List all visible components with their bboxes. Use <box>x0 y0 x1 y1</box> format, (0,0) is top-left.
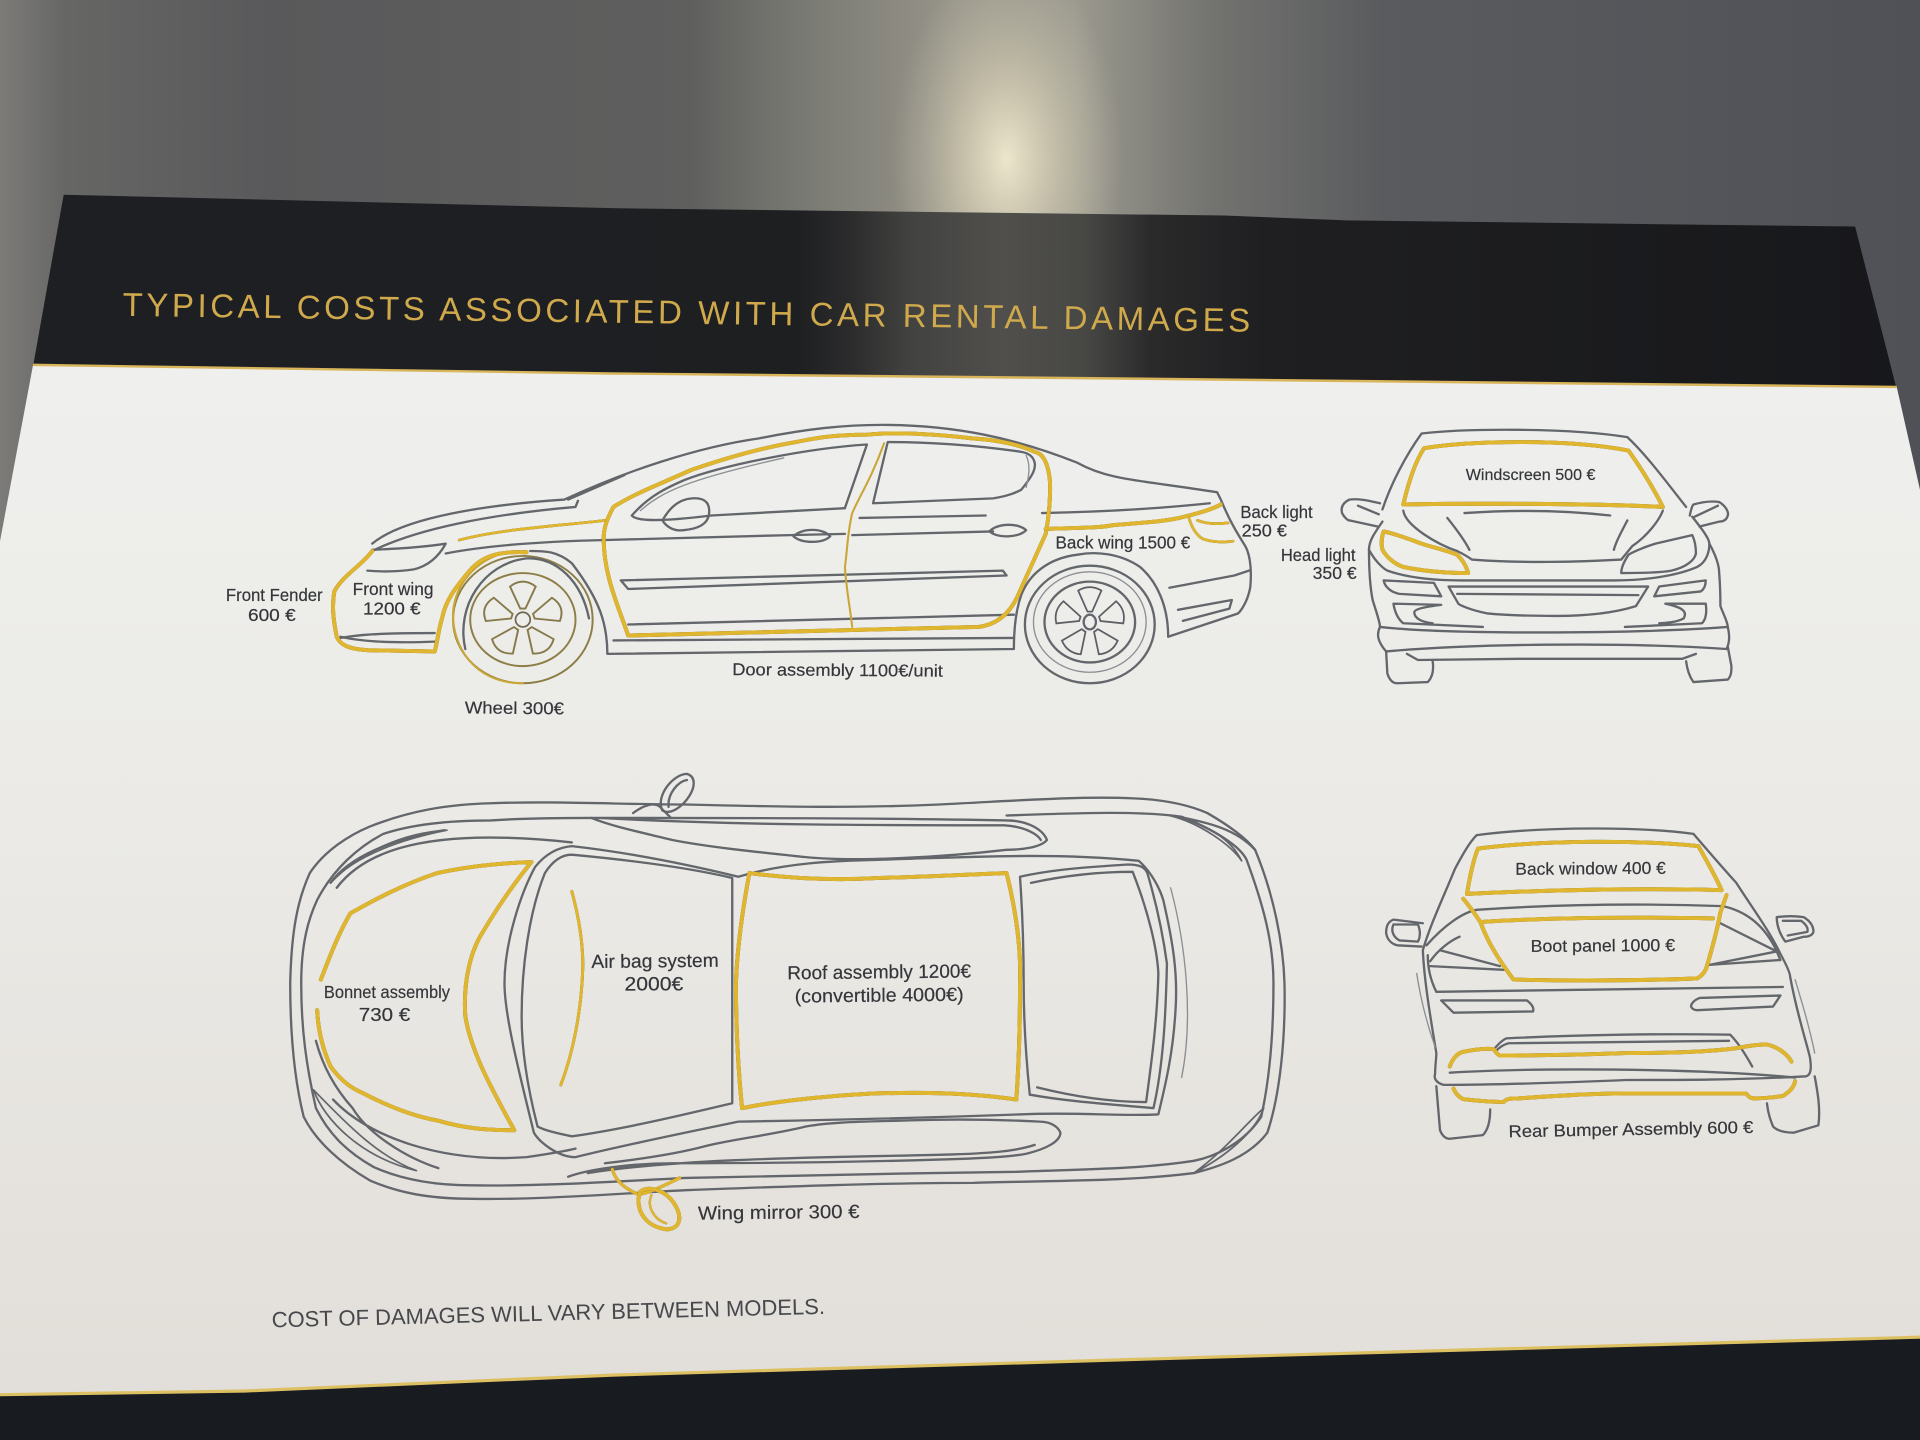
label: front wing <box>353 579 433 619</box>
front: bonnet lines <box>1403 511 1663 562</box>
label: boot panel: Boot panel 1000 € <box>1531 935 1676 956</box>
label: back light: Back light <box>1240 502 1313 522</box>
rear: side body lines <box>1417 973 1815 1053</box>
side: crease lines and sills <box>340 475 1249 642</box>
label: back window: Back window 400 € <box>1515 858 1666 879</box>
label: roof assembly: Roof assembly 1200€ <box>787 961 972 984</box>
rear: plate recess <box>1494 1034 1752 1067</box>
rear: trunk and tail lights <box>1427 905 1783 992</box>
front view of car <box>1281 430 1731 683</box>
side: body outline <box>372 425 1251 654</box>
rear: boot panel highlight <box>1463 895 1727 980</box>
rear view of car <box>1386 829 1819 1141</box>
label: head light <box>1281 545 1357 583</box>
top: roof highlight <box>736 873 1020 1108</box>
top: inner body <box>301 813 1273 1185</box>
rear: lamps <box>1441 996 1780 1013</box>
label: head light: 350 € <box>1313 563 1357 583</box>
label: head light: Head light <box>1281 545 1356 565</box>
side: front wheel <box>453 553 593 683</box>
top: rear parcel line <box>1171 888 1187 1078</box>
label: rear bumper assembly: Rear Bumper Assembly 600 € <box>1508 1117 1754 1141</box>
front: right headlight <box>1621 535 1696 573</box>
label: bonnet assembly <box>324 982 450 1025</box>
rear: bumper highlight <box>1450 1044 1791 1067</box>
label: front fender <box>226 585 323 625</box>
rear: mirrors <box>1386 916 1813 947</box>
side: door handles <box>793 525 1026 542</box>
top: upper side glass <box>591 818 1047 859</box>
footnote: COST OF DAMAGES WILL VARY BETWEEN MODELS. <box>271 1294 825 1332</box>
top: cabin outline <box>504 846 1176 1157</box>
side: door mirror <box>662 498 709 530</box>
top view of car <box>290 774 1285 1229</box>
top: outer body <box>290 798 1285 1199</box>
top: lower wing mirror highlight <box>612 1169 680 1229</box>
side: middle door seam highlight <box>845 443 884 627</box>
label: door assembly: Door assembly 1100€/unit <box>732 659 943 681</box>
label: wheel: Wheel 300€ <box>465 697 565 718</box>
label: back wing: Back wing 1500 € <box>1056 533 1191 553</box>
label: front wing: Front wing <box>353 579 433 599</box>
card bottom band <box>0 1337 1920 1440</box>
title: TYPICAL COSTS ASSOCIATED WITH CAR RENTAL DAMAGES <box>122 287 1250 340</box>
card white panel <box>0 365 1920 1395</box>
rear: back window highlight <box>1467 842 1722 894</box>
side: rear wheel <box>1025 566 1155 683</box>
top: windscreen <box>522 855 732 1136</box>
label: roof assembly: (convertible 4000€) <box>795 985 964 1008</box>
side: crease highlight <box>459 520 605 540</box>
side: front wing and fender highlight <box>333 551 527 651</box>
top: rear window <box>1020 864 1167 1108</box>
rear: wheels <box>1436 1076 1819 1139</box>
front: grille and bumper line <box>1369 544 1709 627</box>
front: mirrors <box>1342 499 1728 527</box>
card header band <box>33 195 1897 389</box>
label: air bag system <box>591 951 719 996</box>
top: lamps <box>313 816 1264 1173</box>
label: windscreen: Windscreen 500 € <box>1466 467 1596 484</box>
side: back wing highlight <box>1046 504 1221 529</box>
label: front fender: 600 € <box>248 605 296 625</box>
label: bonnet assembly: Bonnet assembly <box>324 982 450 1002</box>
front: headlight highlight <box>1382 531 1468 573</box>
top: lower side glass <box>568 1120 1060 1177</box>
rear: body outline <box>1423 829 1811 1085</box>
label: air bag system: 2000€ <box>624 975 684 996</box>
side: headlight <box>367 544 446 571</box>
label: roof assembly <box>787 961 972 1008</box>
front: body outline <box>1369 430 1729 651</box>
side: back light highlight <box>1189 518 1233 542</box>
side: door assembly highlight <box>604 433 1050 636</box>
label: back light: 250 € <box>1242 520 1287 540</box>
label: front wing: 1200 € <box>363 599 421 619</box>
front: bumper <box>1380 627 1728 660</box>
label: front fender: Front Fender <box>226 585 323 605</box>
rear: lower bumper highlight <box>1453 1081 1795 1102</box>
top: upper mirror <box>633 774 694 818</box>
top: bonnet highlight <box>317 862 531 1130</box>
label: bonnet assembly: 730 € <box>359 1004 410 1025</box>
top: air bag highlight <box>561 891 583 1085</box>
label: wing mirror: Wing mirror 300 € <box>698 1202 860 1225</box>
label: air bag system: Air bag system <box>591 951 719 973</box>
side: windows <box>632 442 1035 520</box>
label: back light <box>1240 502 1313 540</box>
front: windscreen highlight <box>1403 442 1663 507</box>
side view of car <box>226 425 1313 718</box>
front: wheels <box>1386 647 1731 683</box>
